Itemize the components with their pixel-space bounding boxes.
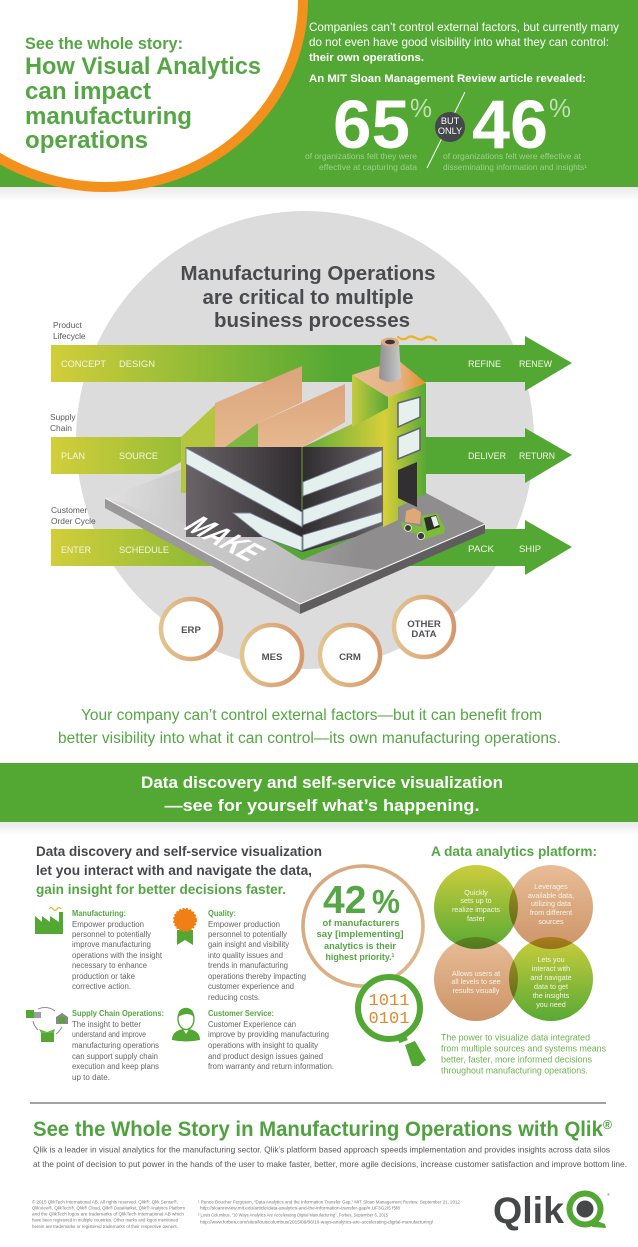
footnote: copyright: herein are trademarks or registered trademarks of their respective owners. xyxy=(32,1224,178,1229)
stat: 65 percent: effective at capturing data xyxy=(319,162,417,172)
closing paragraph: Qlik is a leader in visual analytics for the manufacturing sector. Qlik’s platform based approach speeds implementation and provides insights across data silos xyxy=(33,1144,610,1154)
arrow stage labels: SCHEDULE xyxy=(119,544,169,555)
venn labels: Quickly xyxy=(464,888,488,897)
arrow stage labels: DELIVER xyxy=(468,450,506,461)
row labels: Customer xyxy=(51,505,88,515)
text: manufacturing: Empower production xyxy=(72,920,144,929)
footnote: copyright xyxy=(32,1198,185,1229)
venn: interact xyxy=(509,937,593,1021)
title: See the whole story: xyxy=(25,34,183,53)
banner xyxy=(0,763,638,835)
venn labels: realize impacts xyxy=(452,905,500,914)
intro text: An MIT Sloan Management Review article revealed: xyxy=(309,73,586,85)
section heading: data discovery: let you interact with and navigate the data, xyxy=(36,863,312,878)
logo: Qlik xyxy=(493,1190,610,1231)
text: supply chain operations: execution and keep plans xyxy=(72,1062,159,1071)
callout: visibility statement: better visibility into what it can control—its own manufacturing operations. xyxy=(58,730,561,747)
white title disc xyxy=(0,0,298,182)
text: power to visualize: from multiple sources and systems means xyxy=(441,1044,607,1054)
venn labels: results visually xyxy=(453,986,500,995)
arrow stage labels: PLAN xyxy=(61,450,85,461)
footnote: copyright: have been registered in multiple countries. Other marks and logos mentioned xyxy=(32,1218,178,1222)
text: supply chain operations: can support supply chain xyxy=(72,1052,158,1061)
arrow stage labels: SOURCE xyxy=(119,450,158,461)
venn labels: the insights xyxy=(533,991,570,1000)
venn: all levels xyxy=(434,937,518,1021)
stat: 65 percent: % xyxy=(410,93,432,123)
row labels: Chain xyxy=(50,423,72,433)
row labels: Supply xyxy=(50,412,76,422)
data source: ERP xyxy=(161,599,221,659)
callout: visibility statement: Your company can’t control external factors—but it can benefit from xyxy=(81,707,542,724)
title: can impact xyxy=(25,78,151,105)
title xyxy=(25,34,261,154)
venn: quickly sets up xyxy=(434,865,518,949)
intro text xyxy=(309,21,619,85)
arrow stage labels xyxy=(61,358,555,555)
text: quality: personnel to potentially xyxy=(208,930,287,939)
door xyxy=(398,462,417,507)
footnote: copyright: © 2015 QlikTech International AB. All rights reserved. Qlik®, Qlik Sense®, xyxy=(32,1198,178,1204)
platform xyxy=(105,468,485,614)
venn labels: utilizing data xyxy=(531,899,571,908)
intro text: do not even have good visibility into what they can control: xyxy=(309,36,609,49)
panel: manufacturing operations diagram xyxy=(50,211,572,685)
divider with but only badge xyxy=(427,92,465,168)
venn labels: Allows users at xyxy=(452,969,500,978)
title: manufacturing xyxy=(25,103,192,130)
footnote: sources: http://www.forbes.com/sites/louiscolumbus/2015/09/06/10-ways-analytics-are-accelerating-digital-manufacturing/ xyxy=(200,1220,434,1224)
text: power to visualize xyxy=(441,1032,607,1076)
tower xyxy=(303,360,426,527)
heading xyxy=(180,262,436,332)
footnote: sources: ¹ Renee Boucher Ferguson, “Data Analytics and the Information Transfer Gap,” MIT Sloan Management Review, September 21, 2012 xyxy=(198,1200,460,1204)
venn labels: sets up to xyxy=(460,896,492,905)
text: customer service: Customer Service: xyxy=(208,1009,274,1018)
window xyxy=(398,428,420,459)
text: manufacturing: improve manufacturing xyxy=(72,940,151,949)
text: manufacturing: necessary to enhance xyxy=(72,961,148,970)
footnote: sources: http://sloanreview.mit.edu/article/data-analytics-and-the-information-transfer-gap/#.UF3G2I5 f5f8 xyxy=(200,1206,400,1210)
arrow stage labels: RENEW xyxy=(519,358,552,369)
closing heading: ® xyxy=(603,1117,612,1132)
arrow stage labels: RETURN xyxy=(519,450,555,461)
footnote: sources xyxy=(198,1200,460,1224)
text: quality: reducing costs. xyxy=(208,993,260,1002)
data source: ERP: ERP xyxy=(181,625,201,636)
arrow: product lifecycle xyxy=(51,336,572,391)
logo: Qlik: ® xyxy=(607,1192,610,1197)
callout: 42 percent: % xyxy=(372,883,400,920)
arrow stage labels: SHIP xyxy=(519,543,541,554)
intro text: their own operations. xyxy=(309,52,424,64)
footnote: sources: ² Louis Columbus, “10 Ways Analytics Are Accelerating Digital Manufacturing”, Forbes, September 6, 2015 xyxy=(198,1212,388,1218)
arrow: customer order cycle xyxy=(51,520,572,575)
text: quality: gain insight and visibility xyxy=(208,940,289,949)
text: customer service: improve by providing manufacturing xyxy=(208,1030,329,1039)
icon: supply chain cycle xyxy=(26,1007,68,1042)
text: manufacturing: operations with the insight xyxy=(72,951,163,960)
closing heading: See the Whole Story in Manufacturing Operations with Qlik xyxy=(33,1117,635,1141)
section heading: data discovery: Data discovery and self-service visualization xyxy=(36,844,322,859)
text: power to visualize: The power to visualize data integrated xyxy=(441,1032,590,1042)
venn labels xyxy=(451,882,574,1009)
text: supply chain operations: manufacturing operations xyxy=(72,1041,159,1050)
stat: 65 percent xyxy=(305,86,432,172)
orange ring xyxy=(0,0,308,192)
section heading: data discovery xyxy=(36,844,322,897)
title: operations xyxy=(25,127,148,154)
row labels: Order Cycle xyxy=(51,516,96,526)
stat: 46 percent: % xyxy=(549,93,571,123)
green floor sliver xyxy=(265,537,355,560)
venn labels: interact with xyxy=(532,964,570,973)
heading: are critical to multiple xyxy=(202,286,414,309)
venn labels: you need xyxy=(536,1000,566,1009)
venn labels: data to get xyxy=(534,982,568,991)
venn labels: sources xyxy=(538,917,564,926)
window xyxy=(398,397,420,427)
factory illustration xyxy=(105,336,485,614)
callout: 42 percent: highest priority.¹ xyxy=(326,951,394,962)
text: quality: Empower production xyxy=(208,920,280,929)
venn: leverages data xyxy=(509,865,593,949)
stat: 65 percent: 65 xyxy=(333,86,410,163)
back wall and peach panels xyxy=(181,366,345,493)
callout: 42 percent: 42 xyxy=(323,879,366,922)
stat: 46 percent xyxy=(443,86,587,172)
text: manufacturing xyxy=(72,909,163,991)
intro text: Companies can’t control external factors, but currently many xyxy=(309,21,619,34)
make label: MAKE xyxy=(175,512,273,566)
stat: 46 percent: disseminating information and insights¹ xyxy=(443,162,587,172)
data source: CRM xyxy=(320,625,380,685)
text: supply chain operations: up to date. xyxy=(72,1073,110,1082)
venn labels: faster xyxy=(467,914,486,923)
row labels: Lifecycle xyxy=(53,331,86,341)
data source: other data xyxy=(394,597,454,657)
banner: —see for yourself what’s happening. xyxy=(164,796,480,815)
text: supply chain operations: understand and improve xyxy=(72,1030,147,1039)
footnote: copyright: QlikView®, QlikTech®, Qlik® Cloud, Qlik® DataMarket, Qlik® Analytics Platform xyxy=(32,1204,185,1210)
arrow stage labels: REFINE xyxy=(468,358,501,369)
text: customer service: and product design issues gained xyxy=(208,1052,323,1061)
icon: customer service person xyxy=(172,1008,200,1042)
data source: MES: MES xyxy=(262,652,283,663)
venn labels: Lets you xyxy=(537,955,565,964)
stat: 46 percent: of organizations felt were effective at xyxy=(443,151,582,161)
text: power to visualize: better, faster, more informed decisions xyxy=(441,1054,593,1064)
text: quality: customer experience and xyxy=(208,982,294,991)
arrow: supply chain xyxy=(51,428,572,483)
text: manufacturing: corrective action. xyxy=(72,982,131,991)
text: manufacturing: personnel to potentially xyxy=(72,930,151,939)
title: How Visual Analytics xyxy=(25,53,261,80)
callout: visibility statement xyxy=(58,707,561,747)
footnote: copyright: and the QlikTech logos are trademarks of QlikTech International AB which xyxy=(32,1212,184,1216)
dark building block xyxy=(186,447,383,552)
arrow stage labels: CONCEPT xyxy=(61,358,106,369)
chimney with smoke xyxy=(379,336,436,382)
section heading: analytics platform: A data analytics platform: xyxy=(431,844,597,859)
data source: CRM: CRM xyxy=(339,652,361,663)
stat: 65 percent: of organizations felt they were xyxy=(305,151,417,161)
data source: other data: DATA xyxy=(411,629,437,640)
callout: 42 percent xyxy=(303,866,423,986)
callout: 42 percent: say [implementing] xyxy=(316,928,404,939)
icon: quality rosette xyxy=(174,909,196,945)
venn labels: all levels to see xyxy=(451,977,501,986)
text: quality: trends in manufacturing xyxy=(208,961,288,970)
data source: MES xyxy=(242,625,302,685)
divider with but only badge: ONLY xyxy=(438,126,462,136)
icon: magnifier with binary: 0101 xyxy=(368,1010,410,1029)
heading: Manufacturing Operations xyxy=(180,262,436,285)
text: quality: operations thereby impacting xyxy=(208,972,306,981)
venn labels: Leverages xyxy=(534,882,568,891)
text: manufacturing: production or take xyxy=(72,972,136,981)
arrow stage labels: DESIGN xyxy=(119,358,155,369)
arrow stage labels: ENTER xyxy=(61,544,91,555)
text: quality: Quality: xyxy=(208,909,236,918)
panel: header xyxy=(0,0,638,201)
text: customer service: Customer Experience can xyxy=(208,1020,296,1029)
icon: magnifier with binary xyxy=(358,977,426,1066)
section heading: data discovery: gain insight for better decisions faster. xyxy=(36,882,286,897)
venn labels: available data, xyxy=(528,891,574,900)
text: customer service xyxy=(208,1009,334,1071)
grey backdrop circle xyxy=(76,211,534,669)
forklift truck xyxy=(401,508,445,540)
divider with but only badge: BUT xyxy=(441,116,460,126)
text: manufacturing: Manufacturing: xyxy=(72,909,126,918)
arrow stage labels: PACK xyxy=(468,543,495,554)
closing paragraph: at the point of decision to put power in the hands of the user to make faster, better, more agile decisions, increase customer satisfaction and improve bottom line. xyxy=(33,1159,627,1169)
text: quality xyxy=(208,909,306,1002)
venn labels: from different xyxy=(530,908,572,917)
text: power to visualize: throughout manufacturing operations. xyxy=(441,1066,588,1076)
closing paragraph xyxy=(33,1144,627,1169)
text: customer service: from warranty and return information. xyxy=(208,1062,334,1071)
text: supply chain operations xyxy=(72,1009,164,1082)
banner: Data discovery and self-service visualization xyxy=(141,773,503,792)
text: supply chain operations: The insight to better xyxy=(72,1020,141,1029)
text: quality: into quality issues and xyxy=(208,951,283,960)
venn labels: and navigate xyxy=(530,973,572,982)
icon: factory xyxy=(35,908,63,934)
data source: other data: OTHER xyxy=(407,619,441,630)
stat: 46 percent: 46 xyxy=(472,86,548,163)
text: customer service: operations with insight to quality xyxy=(208,1041,318,1050)
venn diagram xyxy=(434,865,593,1021)
callout: 42 percent: of manufacturers xyxy=(322,917,400,928)
callout: 42 percent: analytics is their xyxy=(324,940,396,951)
heading: business processes xyxy=(214,309,410,332)
icon: magnifier with binary: 1011 xyxy=(368,992,410,1011)
logo: Qlik: Qlik xyxy=(493,1190,564,1231)
text: supply chain operations: Supply Chain Operations: xyxy=(72,1009,164,1018)
row labels xyxy=(50,320,96,526)
row labels: Product xyxy=(53,320,83,330)
